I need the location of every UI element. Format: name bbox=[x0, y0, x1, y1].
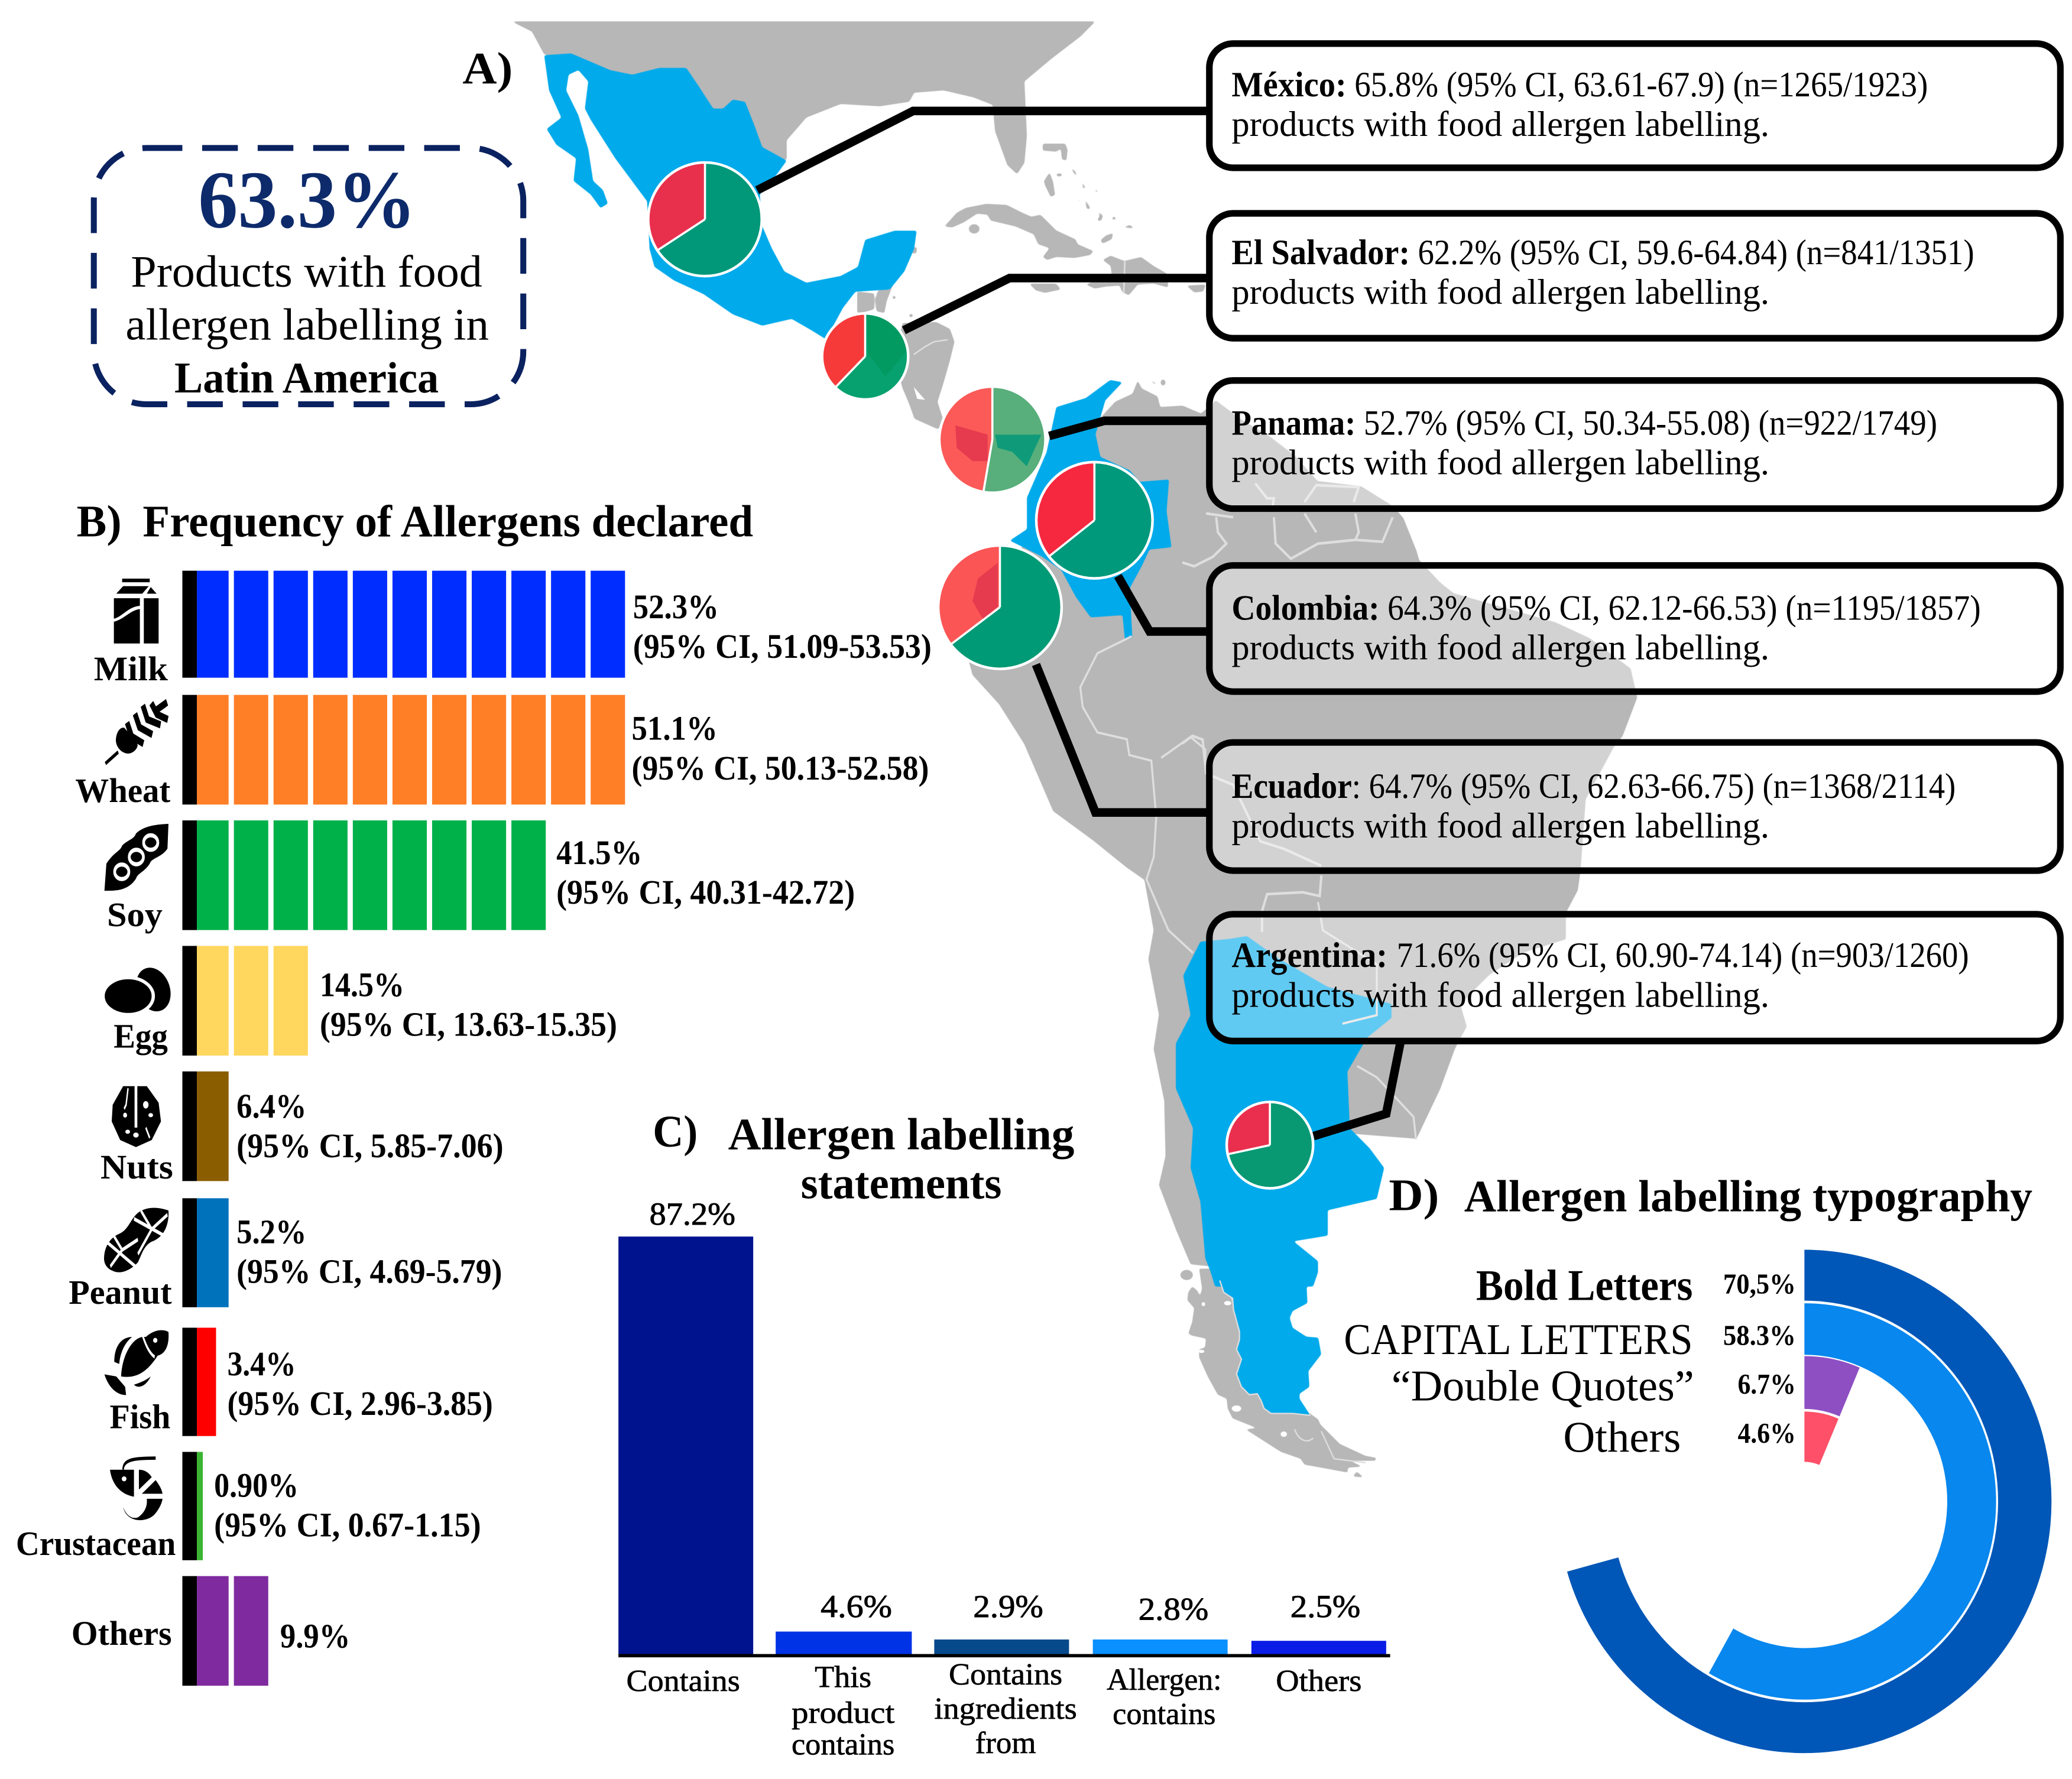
callout: El Salvador bbox=[1210, 213, 2060, 338]
heading: panel B: Frequency of Allergens declared bbox=[142, 497, 753, 547]
bar: Others: 2.5% bbox=[1290, 1589, 1360, 1624]
row: Fish: (95% CI, 2.96-3.85) bbox=[227, 1384, 493, 1423]
row: Egg: 14.5% bbox=[320, 965, 404, 1004]
callout: Colombia: products with food allergen labelling. bbox=[1231, 628, 1769, 667]
connector: Argentina bbox=[1314, 1041, 1400, 1136]
map: lakes and inlets bbox=[914, 387, 1287, 1437]
callout: México bbox=[1210, 44, 2060, 168]
heading: panel B: B) bbox=[77, 497, 122, 547]
ring: Bold Letters 70.5% bbox=[1567, 1250, 2051, 1753]
callout: Argentina: Argentina: bbox=[1231, 936, 1387, 975]
pie: Panama bbox=[939, 387, 1046, 493]
row: Soy bbox=[105, 820, 855, 934]
callout: Argentina: 71.6% (95% CI, 60.90-74.14) (n=903/1260) bbox=[1397, 936, 1969, 975]
heading: panel C: Allergen labelling bbox=[728, 1110, 1074, 1160]
map: Mexico bbox=[544, 53, 917, 339]
bar: Contains: Contains bbox=[627, 1664, 740, 1698]
map: Argentina north bbox=[1176, 936, 1392, 1287]
callout: Colombia: 64.3% (95% CI, 62.12-66.53) (n=1195/1857) bbox=[1387, 588, 1981, 628]
row: Wheat bbox=[75, 695, 929, 810]
row: Nuts: (95% CI, 5.85-7.06) bbox=[236, 1127, 504, 1165]
row: Wheat: (95% CI, 50.13-52.58) bbox=[631, 749, 929, 787]
row: Crustacean bbox=[16, 1452, 481, 1563]
heading: panel C: C) bbox=[653, 1107, 698, 1157]
callout: Colombia bbox=[1210, 566, 2060, 692]
icon: soy pod bbox=[105, 824, 168, 891]
ring: Double Quotes 6.7% bbox=[1804, 1356, 1860, 1416]
bar: This product contains: 4.6% bbox=[821, 1589, 892, 1624]
icon: shrimp bbox=[110, 1458, 163, 1520]
bar: Contains ingredients from: Contains bbox=[949, 1658, 1062, 1692]
ring: Capital Letters 58.3% bbox=[1709, 1303, 1996, 1700]
bar: Contains ingredients from: 2.9% bbox=[973, 1589, 1043, 1624]
ring: Others 4.6% bbox=[1804, 1411, 1838, 1465]
bar: Contains bbox=[618, 1196, 753, 1698]
bar: Allergen: contains bbox=[1093, 1591, 1228, 1731]
row: Milk: 52.3% bbox=[633, 587, 719, 626]
heading: panel C bbox=[653, 1107, 1074, 1208]
row: Wheat: Wheat bbox=[75, 771, 171, 810]
pie: Argentina bbox=[1227, 1102, 1313, 1189]
heading: panel C: statements bbox=[801, 1158, 1001, 1208]
connector: Panama bbox=[1049, 421, 1211, 436]
bar: Allergen: contains: 2.8% bbox=[1139, 1591, 1208, 1627]
row: Peanut: Peanut bbox=[69, 1273, 172, 1311]
callout: 63.3% of products: 63.3% bbox=[198, 154, 416, 245]
row: Others: Others bbox=[72, 1614, 172, 1653]
callout: 63.3% of products bbox=[94, 148, 523, 404]
icon: milk carton bbox=[114, 579, 158, 644]
pie: México bbox=[648, 163, 762, 276]
callout: Panama: 52.7% (95% CI, 50.34-55.08) (n=922/1749) bbox=[1364, 403, 1937, 443]
legend: Others: Others bbox=[1563, 1413, 1681, 1462]
map: southern Chile bbox=[1181, 1269, 1376, 1478]
bar: Contains ingredients from bbox=[934, 1589, 1077, 1760]
row: Nuts: 6.4% bbox=[236, 1087, 307, 1125]
callout: Ecuador: Ecuador bbox=[1231, 767, 1352, 806]
heading: panel D: D) bbox=[1389, 1170, 1439, 1220]
row: Fish: 3.4% bbox=[227, 1345, 296, 1383]
row: Peanut: 5.2% bbox=[236, 1212, 307, 1251]
connector: El Salvador bbox=[904, 278, 1211, 330]
row: Nuts bbox=[100, 1072, 504, 1186]
bar: Contains ingredients from: ingredients bbox=[934, 1692, 1077, 1726]
value: 58.3%: 58.3% bbox=[1723, 1319, 1796, 1351]
icon: peanut bbox=[104, 1208, 168, 1272]
connector: México bbox=[757, 111, 1211, 190]
row: Peanut: (95% CI, 4.69-5.79) bbox=[236, 1252, 502, 1290]
map: land masses bbox=[511, 21, 1638, 1478]
map: South America bbox=[968, 381, 1638, 1268]
callout: 63.3% of products: Latin America bbox=[174, 353, 439, 402]
icon: wheat ear bbox=[105, 702, 168, 764]
legend: Capital Letters: CAPITAL LETTERS bbox=[1344, 1315, 1692, 1364]
callout: Panama bbox=[1210, 381, 2060, 509]
pie: Ecuador bbox=[938, 546, 1062, 669]
map: Colombia bbox=[1010, 380, 1172, 640]
bar: Contains: 87.2% bbox=[650, 1196, 735, 1232]
value: 4.6%: 4.6% bbox=[1737, 1417, 1796, 1449]
bar: Allergen: contains: contains bbox=[1113, 1697, 1216, 1731]
connector: Ecuador bbox=[1036, 664, 1211, 813]
callout: México: 65.8% (95% CI, 63.61-67.9) (n=1265/1923) bbox=[1354, 65, 1928, 105]
callout: Argentina: products with food allergen labelling. bbox=[1231, 975, 1769, 1015]
bar: This product contains: product bbox=[792, 1696, 894, 1730]
panel B: pictogram bar chart bbox=[16, 571, 932, 1686]
map: Caribbean islands and Central America bbox=[857, 144, 1205, 429]
callout: México: products with food allergen labelling. bbox=[1231, 105, 1769, 144]
callout: Panama: products with food allergen labelling. bbox=[1231, 443, 1769, 482]
callout: El Salvador: 62.2% (95% CI, 59.6-64.84) (n=841/1351) bbox=[1418, 233, 1974, 272]
row: Peanut bbox=[69, 1198, 502, 1311]
callout: Argentina bbox=[1210, 914, 2060, 1041]
row: Crustacean: (95% CI, 0.67-1.15) bbox=[214, 1506, 481, 1544]
map: highlighted countries bbox=[544, 53, 1392, 1416]
bar: Contains ingredients from: from bbox=[975, 1726, 1036, 1760]
legend: Double Quotes: “Double Quotes” bbox=[1392, 1361, 1694, 1410]
value: 70,5%: 70,5% bbox=[1723, 1267, 1796, 1300]
row: Milk bbox=[94, 571, 932, 688]
panel C: bar chart of labelling statements bbox=[618, 1196, 1390, 1761]
connector: Colombia bbox=[1118, 576, 1211, 631]
callout: El Salvador: El Salvador: bbox=[1231, 233, 1410, 272]
legend: Bold Letters: Bold Letters bbox=[1476, 1261, 1692, 1309]
icon: fish bbox=[105, 1330, 168, 1395]
row: Crustacean: 0.90% bbox=[214, 1466, 299, 1505]
pie: Colombia bbox=[1036, 462, 1153, 579]
row: Others: 9.9% bbox=[280, 1616, 350, 1655]
row: Soy: 41.5% bbox=[556, 833, 642, 872]
callout: Ecuador bbox=[1210, 742, 2060, 871]
bar: Allergen: contains: Allergen: bbox=[1107, 1663, 1222, 1697]
callout: Panama: Panama: bbox=[1231, 403, 1356, 443]
map: country borders bbox=[914, 261, 1416, 1463]
row: Egg bbox=[103, 946, 617, 1056]
row: Crustacean: Crustacean bbox=[16, 1524, 176, 1563]
row: Wheat: 51.1% bbox=[631, 709, 718, 748]
row: Soy: (95% CI, 40.31-42.72) bbox=[556, 873, 855, 911]
row: Milk: Milk bbox=[94, 650, 168, 688]
callout: 63.3% of products: Products with food bbox=[131, 247, 482, 297]
row: Milk: (95% CI, 51.09-53.53) bbox=[633, 627, 932, 665]
panel D: radial bar chart bbox=[1344, 1250, 2051, 1753]
callout: 63.3% of products: allergen labelling in bbox=[125, 300, 489, 349]
row: Soy: Soy bbox=[107, 895, 163, 934]
row: Fish bbox=[105, 1327, 493, 1436]
icon: eggs bbox=[103, 963, 177, 1016]
bar: Others: Others bbox=[1276, 1664, 1362, 1698]
bar: Others bbox=[1251, 1589, 1386, 1698]
callout: Ecuador: : 64.7% (95% CI, 62.63-66.75) (n=1368/2114) bbox=[1352, 767, 1956, 806]
callout: México: México: bbox=[1231, 65, 1347, 105]
icon: walnut bbox=[112, 1082, 161, 1147]
panel label A: A) bbox=[462, 44, 513, 93]
row: Others bbox=[72, 1576, 350, 1686]
bar: This product contains: contains bbox=[792, 1728, 894, 1761]
callout: Ecuador: products with food allergen labelling. bbox=[1231, 806, 1769, 846]
map: North America bbox=[511, 21, 1095, 174]
panel A: map of Latin America bbox=[511, 21, 1638, 1478]
bar: This product contains bbox=[776, 1589, 912, 1761]
heading: panel D: Allergen labelling typography bbox=[1464, 1172, 2032, 1222]
row: Egg: (95% CI, 13.63-15.35) bbox=[320, 1005, 617, 1043]
callout: El Salvador: products with food allergen labelling. bbox=[1231, 272, 1769, 312]
row: Egg: Egg bbox=[114, 1017, 168, 1056]
row: Nuts: Nuts bbox=[100, 1148, 173, 1186]
map: Argentina south bbox=[1210, 1267, 1321, 1416]
pie: El Salvador bbox=[822, 313, 908, 400]
callout: Colombia: Colombia: bbox=[1231, 588, 1380, 628]
row: Fish: Fish bbox=[110, 1397, 170, 1436]
value: 6.7%: 6.7% bbox=[1737, 1368, 1796, 1400]
bar: This product contains: This bbox=[815, 1660, 871, 1694]
